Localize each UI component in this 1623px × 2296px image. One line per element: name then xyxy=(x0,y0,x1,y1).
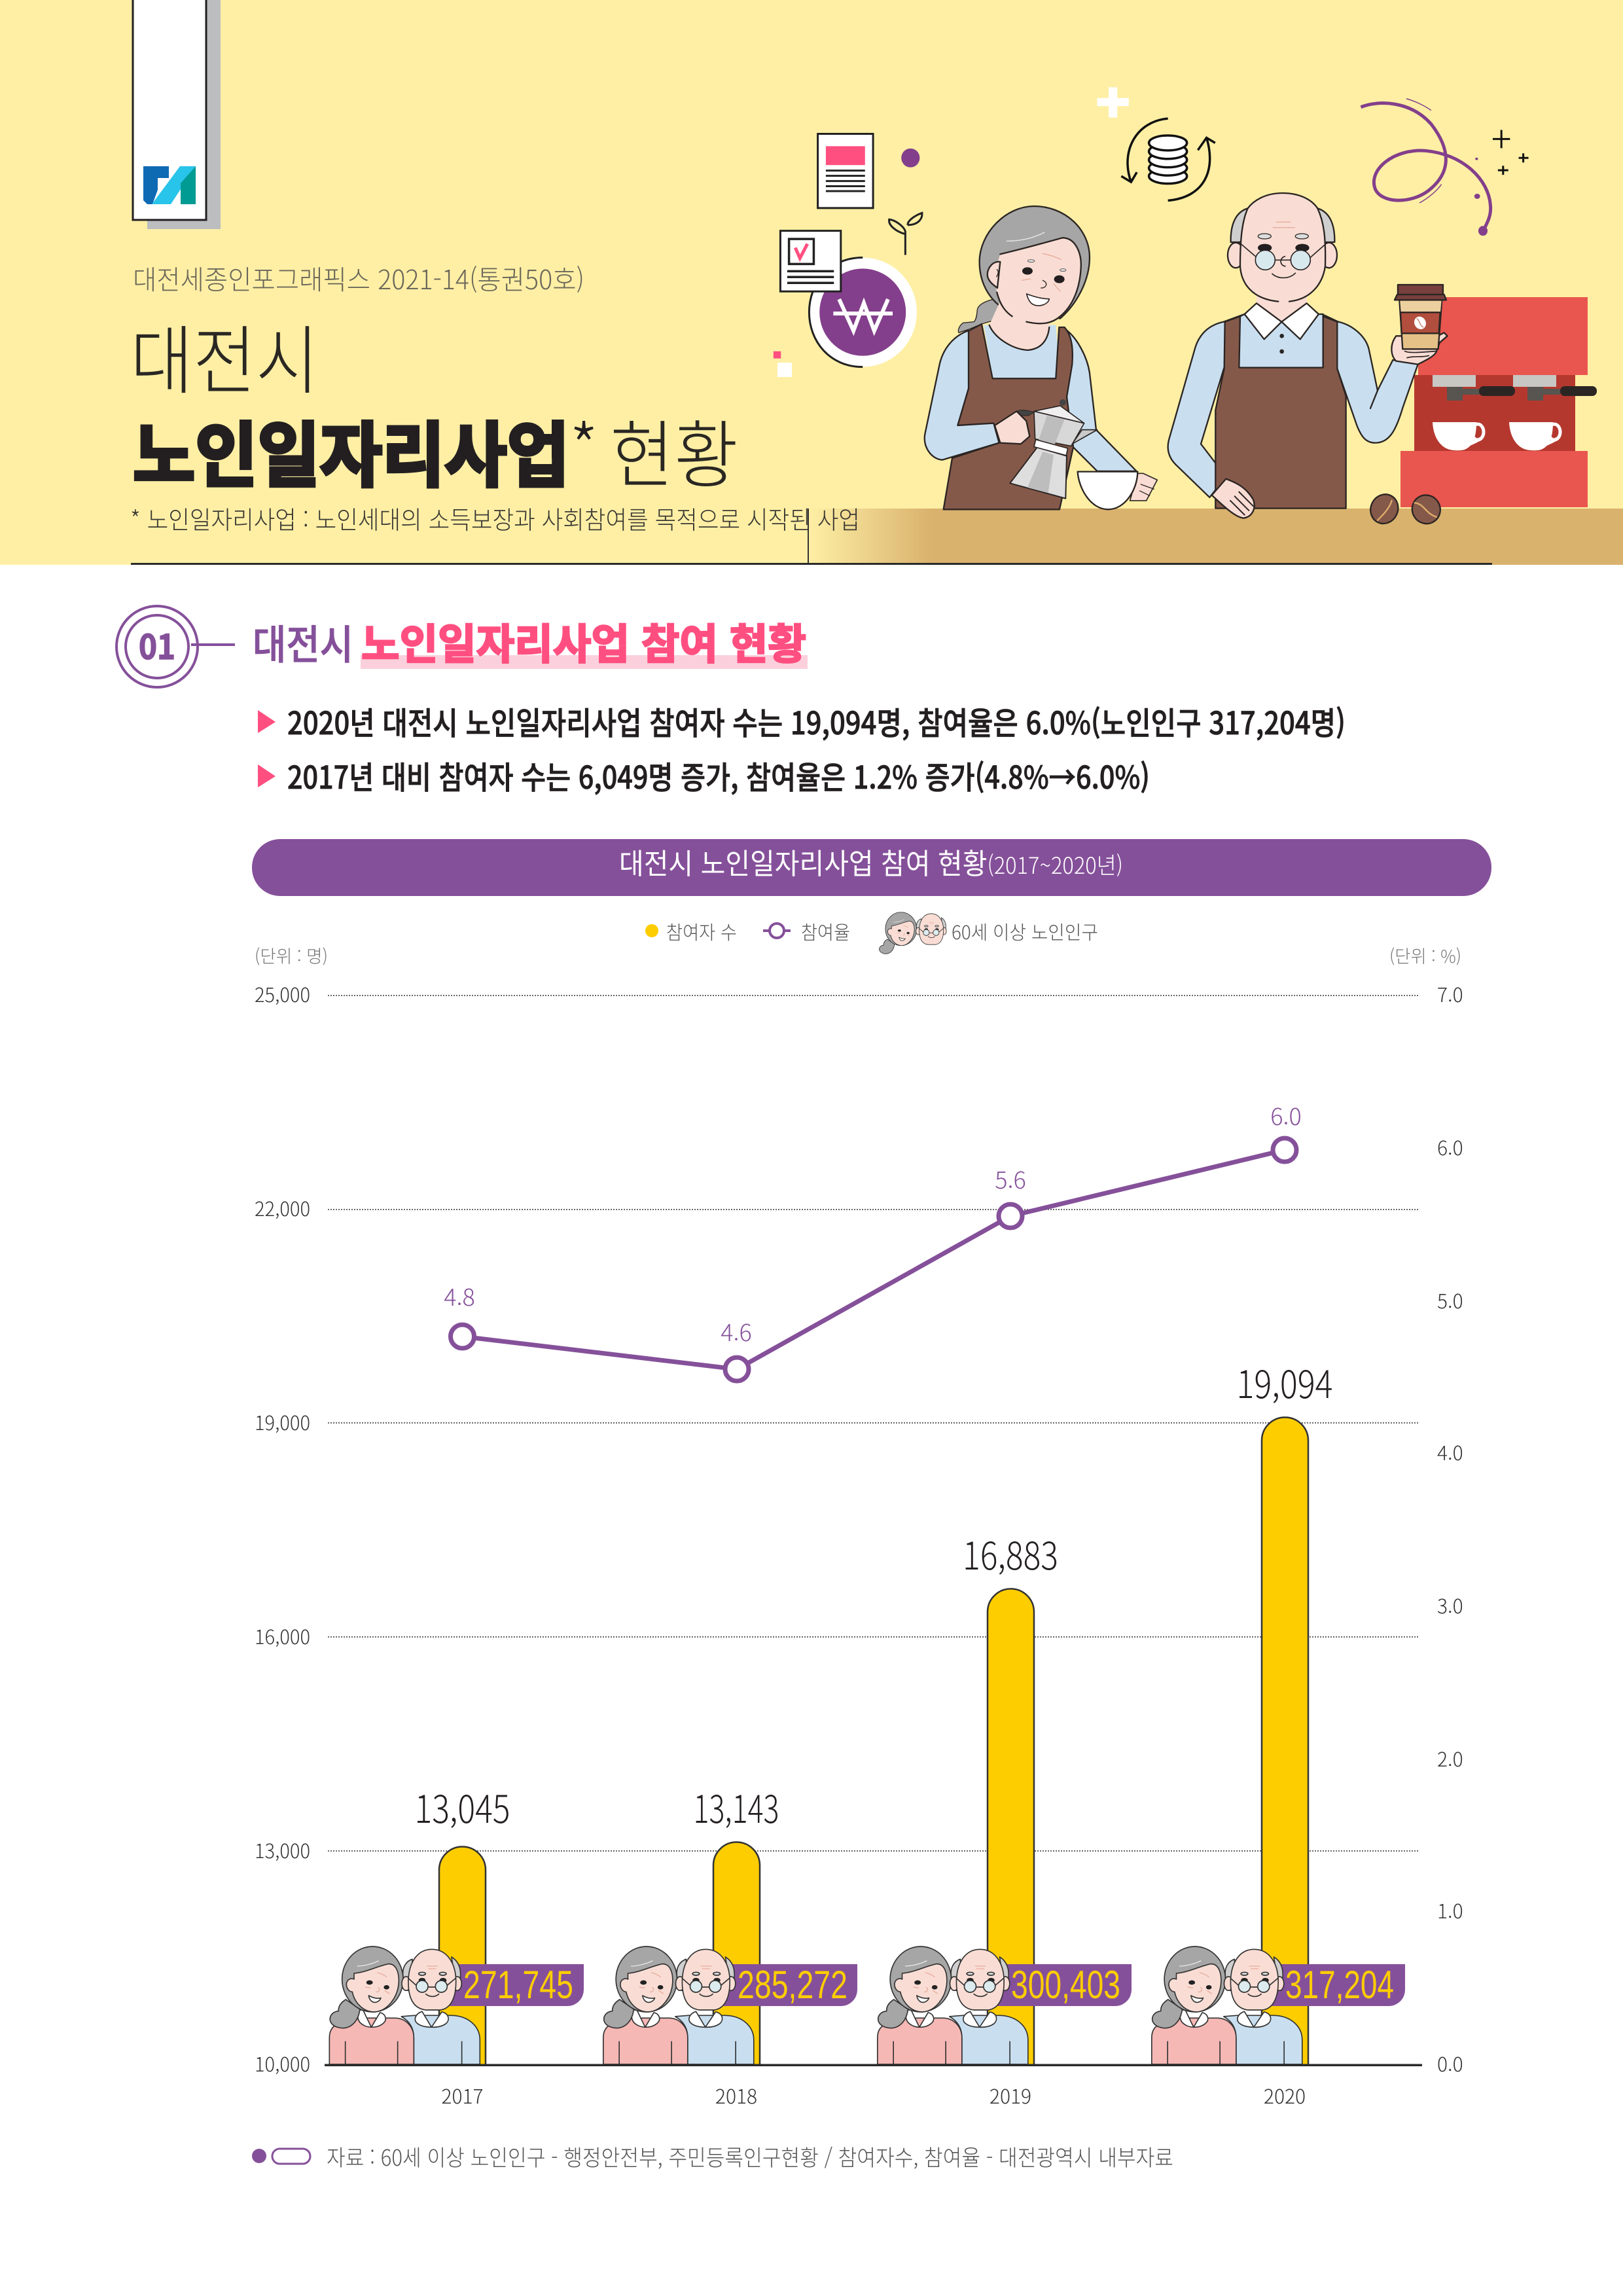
senior population 2019 xyxy=(878,1946,1132,2064)
left axis labels: 13,000 xyxy=(255,1835,310,1864)
shirt xyxy=(1239,314,1323,368)
neck xyxy=(990,301,1049,350)
right axis labels: 5.0 xyxy=(1437,1285,1463,1314)
chart title bar: 대전시 노인일자리사업 참여 현황(2017~2020년) xyxy=(619,840,1123,882)
senior population 2020: 317,204 xyxy=(1285,1963,1394,2007)
bar 2020: 19,094 xyxy=(1237,1354,1332,1409)
bar 2018: 13,143 xyxy=(694,1779,779,1834)
title: 대전시 xyxy=(130,301,319,409)
blouse xyxy=(984,325,1060,378)
icon: legend senior faces xyxy=(880,912,946,954)
right axis labels: 3.0 xyxy=(1437,1590,1463,1619)
x axis year labels: 2017 xyxy=(441,2081,484,2109)
arm sleeve: left xyxy=(925,331,999,460)
hand holding cup xyxy=(1391,332,1448,365)
right axis labels: 6.0 xyxy=(1437,1132,1463,1161)
face xyxy=(988,238,1081,323)
bar chart: participants xyxy=(415,1354,1332,2065)
chart title bar xyxy=(252,839,1491,896)
key finding bullet 1: 2020년 대전시 노인일자리사업 참여자 수는 19,094명, 참여율은 6.0%(노인인구 317,204명) xyxy=(287,698,1346,744)
chart legend xyxy=(645,912,1098,954)
neck xyxy=(1257,293,1307,322)
facial features xyxy=(1022,253,1066,306)
chart legend: 참여율 xyxy=(801,918,850,945)
title: 현황 xyxy=(610,397,738,503)
icon: logo xyxy=(143,166,196,204)
illustration: decorative items xyxy=(774,87,1529,377)
footnote: * 노인일자리사업 : 노인세대의 소득보장과 사회참여를 목적으로 시작된 사업 xyxy=(130,500,860,536)
section heading: 노인일자리사업 참여 현황 xyxy=(361,611,806,672)
section heading: 대전시 xyxy=(253,612,353,671)
icon: purple squiggle xyxy=(1361,99,1491,236)
illustration: grandfather holding coffee xyxy=(1168,193,1448,529)
bar 2019 xyxy=(963,1526,1058,2065)
side hair xyxy=(1231,208,1249,242)
senior population 2017: 271,745 xyxy=(463,1963,573,2007)
hair bun xyxy=(958,299,1000,332)
left axis labels: 22,000 xyxy=(255,1193,310,1222)
right axis labels: 7.0 xyxy=(1437,979,1463,1008)
gridlines xyxy=(328,996,1419,1851)
icon: black plus signs xyxy=(1493,130,1529,175)
collar xyxy=(1245,303,1281,339)
right axis labels: 0.0 xyxy=(1437,2049,1463,2077)
x axis baseline xyxy=(325,2064,1422,2066)
bar 2017: 13,045 xyxy=(415,1779,510,1834)
icon: checklist document xyxy=(780,231,841,291)
bar 2018 xyxy=(694,1779,779,2065)
line chart: participation rate xyxy=(444,1098,1302,1381)
right axis labels: 1.0 xyxy=(1437,1895,1463,1924)
key finding bullet 2: 2017년 대비 참여자 수는 6,049명 증가, 참여율은 1.2% 증가(4.8%→6.0%) xyxy=(287,752,1150,798)
head xyxy=(1240,193,1325,302)
arm sleeve: left xyxy=(1168,314,1245,497)
arm sleeve: right xyxy=(1065,329,1137,471)
left axis labels: 10,000 xyxy=(255,2049,310,2077)
chart legend: 60세 이상 노인인구 xyxy=(952,918,1098,945)
icon: purple dot xyxy=(901,149,919,168)
icon: white plus xyxy=(1097,87,1129,118)
facial features xyxy=(1240,222,1325,278)
bar 2020 xyxy=(1237,1354,1332,2065)
arm sleeve: right xyxy=(1322,314,1418,443)
header subtitle: 대전세종인포그래픽스 2021-14(통권50호) xyxy=(133,258,584,297)
icon: white cup 2 xyxy=(1509,422,1560,450)
left axis labels xyxy=(255,979,310,2077)
line chart: participation rate: 5.6 xyxy=(995,1162,1026,1196)
panel: header band xyxy=(0,0,1623,565)
icon: coffee beans xyxy=(1366,490,1446,529)
left axis labels: 25,000 xyxy=(255,979,310,1008)
title xyxy=(130,301,738,503)
hand xyxy=(995,411,1029,444)
line chart: participation rate: 4.6 xyxy=(721,1314,752,1348)
bar 2017 xyxy=(415,1779,510,2065)
cup and holding hand xyxy=(1078,472,1157,509)
x axis year labels: 2019 xyxy=(990,2081,1031,2109)
title: * xyxy=(569,397,598,492)
right axis labels: 4.0 xyxy=(1437,1437,1463,1466)
icon: takeaway coffee cup xyxy=(1395,285,1446,349)
icon: coin stack with rotating arrows xyxy=(1121,118,1215,200)
line chart: participation rate: 4.8 xyxy=(444,1279,475,1313)
hand on counter xyxy=(1212,479,1255,518)
section number badge: 01 xyxy=(139,620,175,669)
apron xyxy=(1215,316,1346,509)
section number badge xyxy=(116,606,235,687)
icon: won coin xyxy=(809,257,917,367)
counter top xyxy=(808,509,1623,565)
apron xyxy=(944,324,1073,509)
right axis unit: (단위 : %) xyxy=(1389,942,1461,968)
senior population 2020 xyxy=(1152,1946,1405,2064)
header rule xyxy=(131,563,1492,565)
left axis unit: (단위 : 명) xyxy=(255,942,328,968)
chart legend: 참여자 수 xyxy=(666,918,737,945)
left axis labels: 19,000 xyxy=(255,1407,310,1436)
right axis labels: 2.0 xyxy=(1437,1744,1463,1772)
hair xyxy=(980,206,1090,319)
moka pot xyxy=(1010,399,1097,499)
senior population 2018 xyxy=(603,1946,857,2064)
x axis year labels: 2020 xyxy=(1264,2081,1306,2109)
senior population 2019: 300,403 xyxy=(1011,1963,1120,2007)
icon: white cup 1 xyxy=(1433,422,1484,450)
icon: sprout xyxy=(889,213,922,255)
bar 2019: 16,883 xyxy=(963,1526,1058,1581)
senior population 2017 xyxy=(329,1946,584,2064)
logo tab xyxy=(133,0,221,229)
illustration: grandmother pouring coffee xyxy=(925,206,1157,509)
right axis labels xyxy=(1437,979,1463,2077)
left axis labels: 16,000 xyxy=(255,1621,310,1650)
illustration: espresso machine xyxy=(1400,297,1597,507)
x axis year labels: 2018 xyxy=(715,2081,757,2109)
x axis year labels xyxy=(441,2081,1306,2109)
ears xyxy=(1228,243,1244,268)
confetti squares xyxy=(774,351,792,377)
title: 노인일자리사업 xyxy=(133,399,569,501)
senior population 2018: 285,272 xyxy=(738,1963,847,2007)
source note: 자료 : 60세 이상 노인인구 - 행정안전부, 주민등록인구현황 / 참여자수, 참여율 - 대전광역시 내부자료 xyxy=(327,2140,1173,2172)
line chart: participation rate: 6.0 xyxy=(1270,1098,1302,1132)
icon: document with pink block xyxy=(818,134,873,208)
